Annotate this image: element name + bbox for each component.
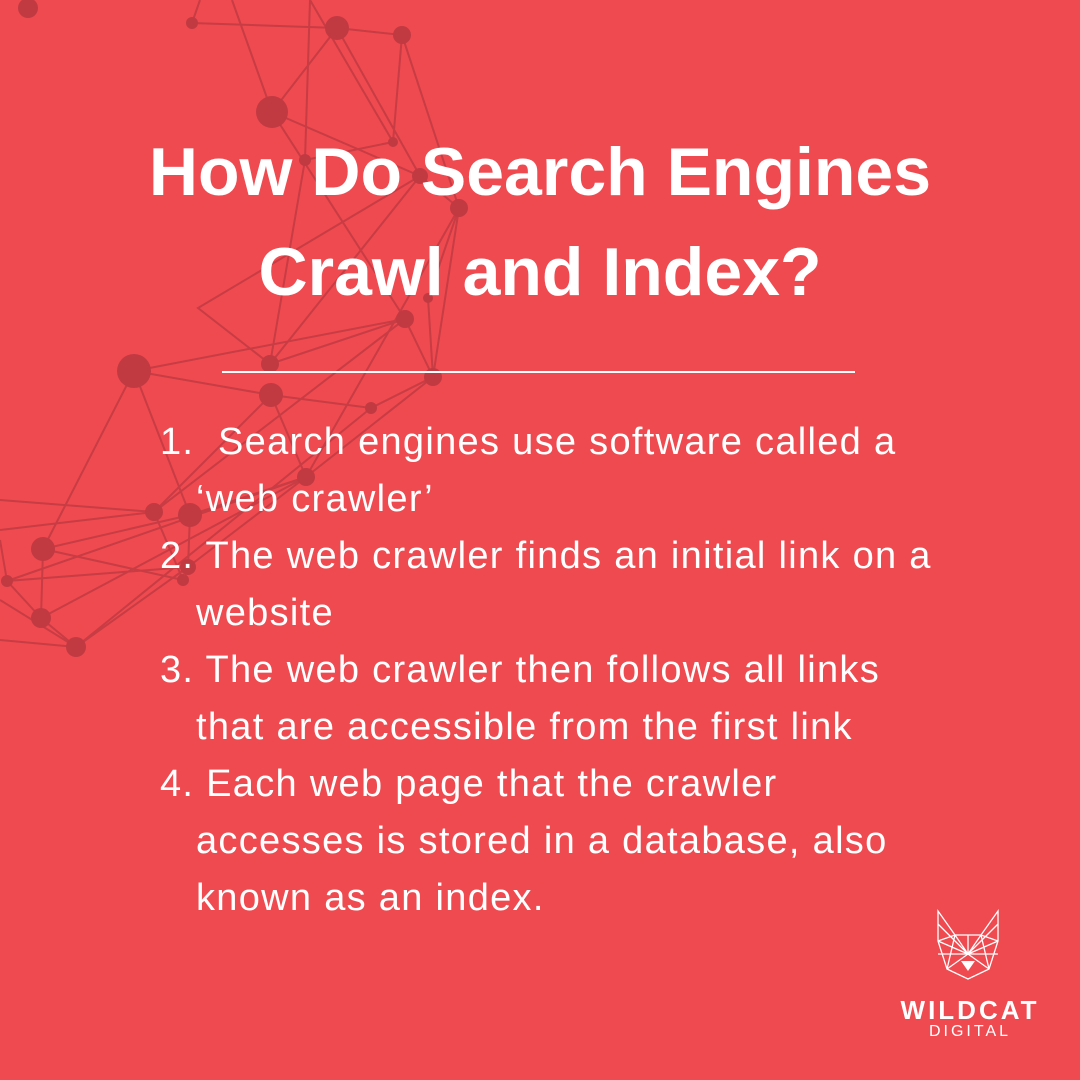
title: Crawl and Index? xyxy=(258,234,822,310)
list: 4. Each web page that the crawler xyxy=(160,763,777,805)
list: that are accessible from the first link xyxy=(196,706,853,748)
title: How Do Search Engines xyxy=(149,134,931,210)
logo xyxy=(900,909,1039,1040)
list: accesses is stored in a database, also xyxy=(196,820,888,862)
divider xyxy=(222,371,855,373)
list: 2. The web crawler finds an initial link on a xyxy=(160,535,932,577)
list: 3. The web crawler then follows all links xyxy=(160,649,880,691)
list: website xyxy=(196,592,334,634)
list: known as an index. xyxy=(196,877,545,919)
brand name: WILDCAT xyxy=(901,995,1039,1025)
brand subtitle: DIGITAL xyxy=(929,1023,1011,1040)
icon: cat head xyxy=(937,909,999,980)
title xyxy=(149,134,931,310)
list xyxy=(160,421,932,919)
list: 1. Search engines use software called a xyxy=(160,421,896,463)
list: ‘web crawler’ xyxy=(196,478,434,520)
